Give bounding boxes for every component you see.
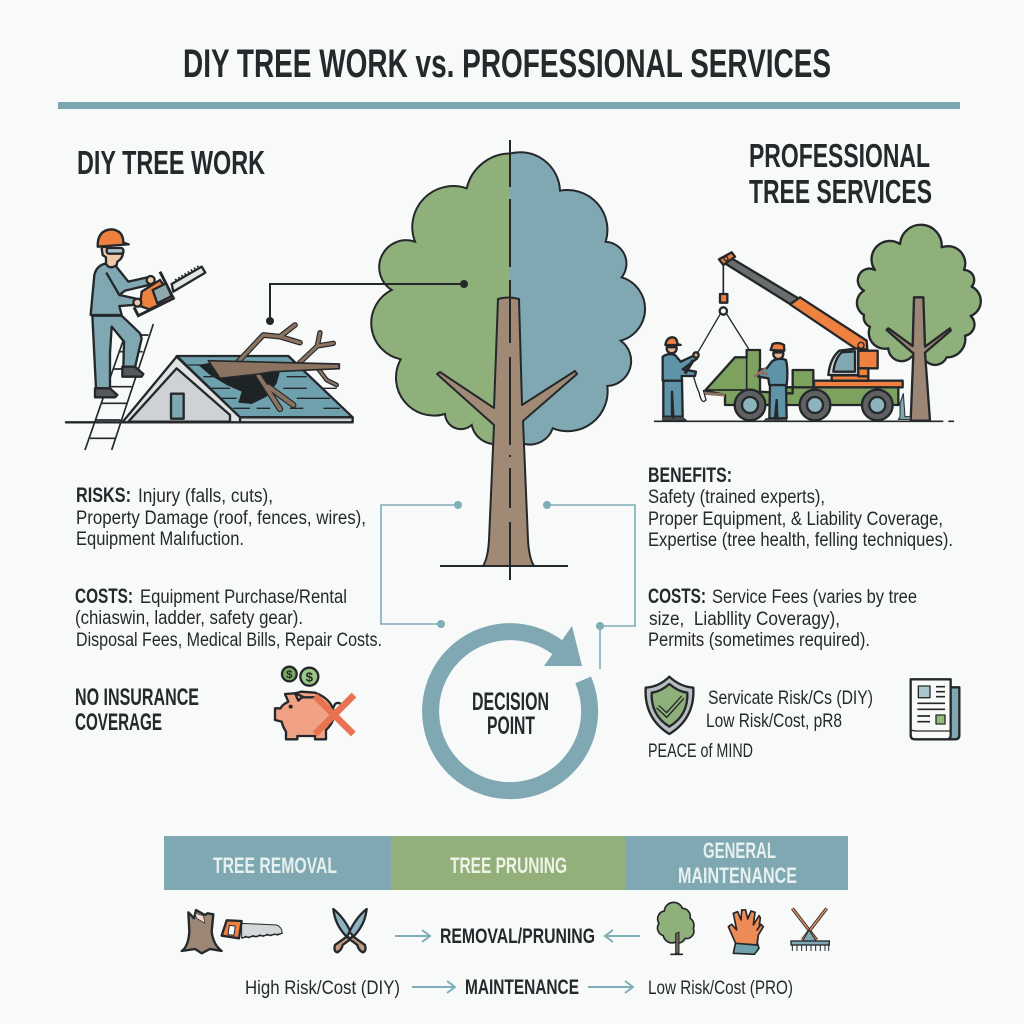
text block: DIY costs: (chiaswin, ladder, safety gear).: [75, 608, 303, 629]
ground line: [66, 419, 123, 426]
text block: no insurance coverage: NO INSURANCE: [75, 684, 199, 711]
text block: professional costs: COSTS:: [648, 585, 706, 608]
icon: rake: [791, 908, 829, 951]
text block: risks: Injury (falls, cuts),: [138, 486, 273, 507]
comparison text beside shield: Low Risk/Cost, pR8: [706, 711, 842, 732]
text block: professional costs: Service Fees (varies by tree: [712, 587, 917, 608]
bottom row: risk and cost flow: MAINTENANCE: [465, 976, 579, 999]
comparison text beside shield: [706, 688, 873, 732]
ground: [654, 419, 954, 424]
icon: small tree: [658, 902, 694, 954]
text block: no insurance coverage: COVERAGE: [75, 709, 162, 736]
decision point label: DECISION: [472, 688, 549, 716]
text block: benefits: Expertise (tree health, felling techniques).: [648, 530, 953, 551]
text block: professional costs: Permits (sometimes required).: [648, 630, 870, 651]
comparison text beside shield: Servicate Risk/Cs (DIY): [708, 688, 873, 709]
heading: DIY tree work: DIY TREE WORK: [77, 144, 265, 181]
text block: benefits: [648, 464, 953, 551]
text block: benefits: BENEFITS:: [648, 464, 732, 487]
text block: professional costs: [648, 585, 917, 651]
text block: risks: Equipment Malıfuction.: [76, 529, 244, 550]
decision point label: [472, 688, 549, 740]
label: removal/pruning: REMOVAL/PRUNING: [440, 925, 595, 948]
category band: MAINTENANCE: [678, 863, 797, 888]
chainsaw: [133, 265, 205, 316]
icon: shield with check: [646, 677, 693, 734]
illustration: central split tree: [371, 140, 645, 580]
left crew member: [663, 337, 699, 421]
stabilizer: [898, 393, 911, 419]
category band: TREE REMOVAL: [213, 853, 337, 878]
roof: [122, 356, 353, 422]
title rule: [58, 102, 960, 109]
text block: DIY costs: COSTS:: [75, 585, 133, 608]
callout line from tree to roof: [266, 280, 468, 325]
heading: professional tree services: TREE SERVICES: [749, 173, 932, 210]
text block: DIY costs: Disposal Fees, Medical Bills, Repair Costs.: [76, 630, 382, 651]
text block: risks: Property Damage (roof, fences, wires),: [76, 508, 366, 529]
decision point label: POINT: [487, 712, 535, 740]
text: peace of mind: PEACE of MIND: [648, 741, 753, 762]
text block: no insurance coverage: [75, 684, 199, 736]
connector: left tree to decision: [381, 501, 462, 628]
arrow: to removal/pruning: [395, 930, 430, 942]
icons: stump, saw: [182, 910, 282, 953]
icon: gloves: [728, 910, 763, 954]
text block: DIY costs: [75, 585, 382, 651]
chipper truck: [705, 350, 903, 420]
text block: benefits: Safety (trained experts),: [648, 487, 825, 508]
decision point cycle arrow: [431, 626, 590, 791]
text block: risks: RISKS:: [76, 484, 131, 507]
fallen branches: [237, 325, 337, 409]
icon: piggy bank with cross: $: [286, 669, 293, 681]
connector: right tree to decision: [543, 501, 635, 669]
icon: piggy bank with cross: $: [306, 669, 314, 684]
text block: risks: [76, 484, 366, 550]
bottom row: risk and cost flow: High Risk/Cost (DIY): [245, 978, 400, 999]
background tree: [857, 225, 981, 421]
right crew member: [754, 343, 787, 421]
heading: professional tree services: PROFESSIONAL: [749, 137, 930, 174]
ladder: [85, 324, 153, 450]
text block: benefits: Proper Equipment, & Liability Coverage,: [648, 509, 943, 530]
illustration: worker with chainsaw on ladder and damaged roof: [66, 229, 353, 450]
bottom row: risk and cost flow: Low Risk/Cost (PRO): [648, 978, 793, 999]
icon: document: [911, 679, 959, 739]
text block: professional costs: size, Liabllity Coveragy),: [649, 609, 840, 630]
heading: professional tree services: [749, 137, 932, 210]
icon: piggy bank with cross: [275, 667, 354, 739]
bottom row: risk and cost flow: [245, 976, 793, 999]
crane: [693, 252, 878, 401]
category band: GENERAL: [703, 838, 776, 863]
text block: DIY costs: Equipment Purchase/Rental: [140, 587, 347, 608]
illustration: crane, chipper truck, crew and tree: [654, 225, 981, 421]
worker body: [91, 229, 149, 397]
arrow: from maintenance side: [605, 930, 640, 942]
icon: pruning shears: [333, 909, 367, 952]
category band: [164, 836, 848, 890]
category band: TREE PRUNING: [450, 853, 567, 878]
